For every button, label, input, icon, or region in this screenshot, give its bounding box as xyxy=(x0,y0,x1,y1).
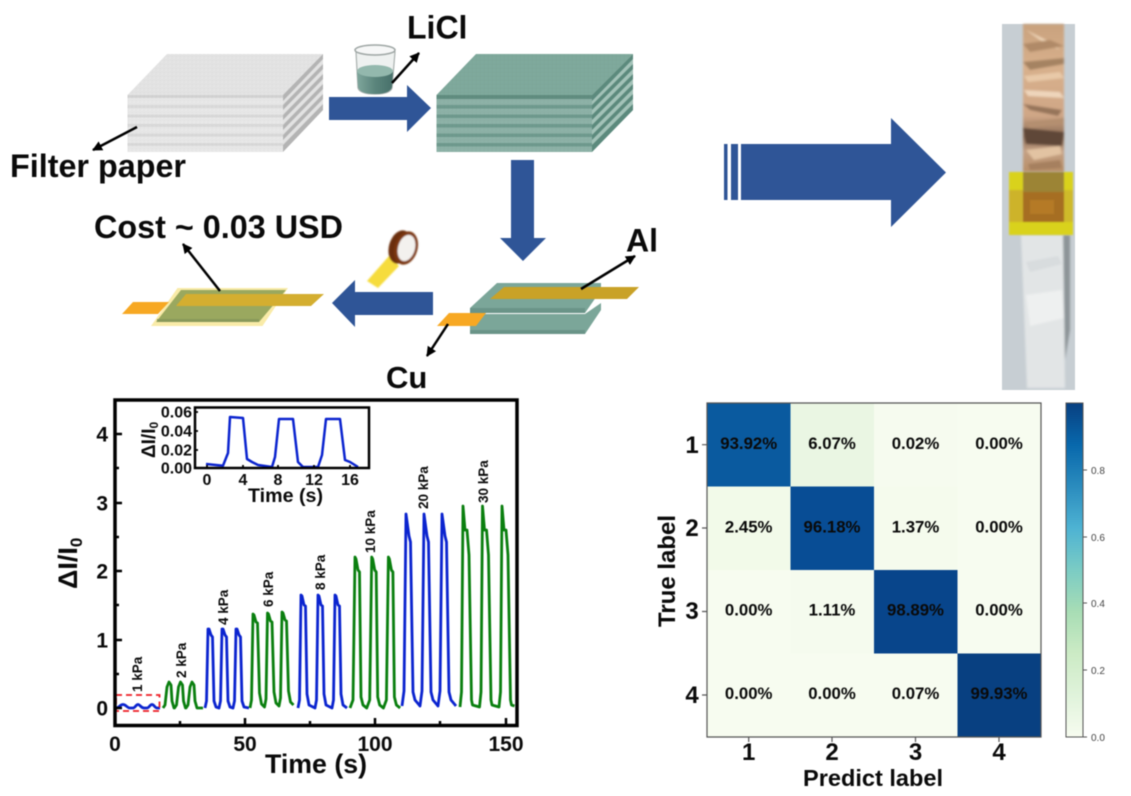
label: Cu: Cu xyxy=(386,360,427,395)
pressure labels: 2 kPa xyxy=(174,642,189,678)
chart curve: 30 kPa xyxy=(460,506,514,707)
line chart: current response vs time xyxy=(53,400,524,779)
inset chart: 1 kPa response: 0 xyxy=(203,472,212,489)
matrix values: 0.00% xyxy=(725,684,773,703)
inset chart: 1 kPa response: ΔI/I xyxy=(139,428,160,458)
matrix row labels xyxy=(685,432,699,709)
matrix values: 96.18% xyxy=(804,518,861,536)
pressure labels: 30 kPa xyxy=(476,460,491,503)
colorbar: 0.4 xyxy=(1091,599,1105,610)
inset chart: 1 kPa response: 0.00 xyxy=(161,460,192,478)
chart curve: 20 kPa xyxy=(402,514,456,706)
callout: dashed red box xyxy=(116,695,160,711)
polyimide tape xyxy=(1009,172,1073,235)
x axis tick labels: 150 xyxy=(488,733,524,756)
pressure labels: 10 kPa xyxy=(363,510,378,553)
y axis title: 0 xyxy=(67,538,86,547)
confusion matrix heatmap xyxy=(655,403,1105,791)
pressure labels: 1 kPa xyxy=(130,656,145,692)
x axis tick labels: 50 xyxy=(233,733,257,756)
chart curve: 1 kPa xyxy=(116,704,160,708)
inset chart: 1 kPa response: 8 xyxy=(274,472,283,489)
device: paper with Al and Cu electrodes xyxy=(437,283,639,334)
inset chart: 1 kPa response: 4 xyxy=(239,472,248,489)
matrix values: 6.07% xyxy=(808,434,856,453)
colorbar xyxy=(1066,403,1105,744)
pressure labels: 8 kPa xyxy=(313,554,328,590)
matrix column labels xyxy=(742,739,1006,766)
arrow: cost callout xyxy=(183,244,220,291)
matrix row labels: 4 xyxy=(685,682,699,709)
chart curve: 6 kPa xyxy=(250,612,294,708)
x axis title: Time (s) xyxy=(265,749,367,779)
matrix values xyxy=(720,434,1028,703)
matrix row labels: 1 xyxy=(685,432,699,459)
matrix values: 0.00% xyxy=(975,600,1023,620)
x axis tick labels: 100 xyxy=(357,733,393,756)
matrix column labels: 4 xyxy=(992,739,1006,766)
icon: polyimide tape roll xyxy=(367,228,422,288)
icon: beaker of LiCl solution xyxy=(355,45,395,94)
pressure labels: 4 kPa xyxy=(216,589,231,625)
stack: filter paper xyxy=(128,54,323,152)
matrix values: 1.11% xyxy=(809,600,855,620)
arrow: beaker to LiCl label xyxy=(392,53,419,83)
matrix row labels: 3 xyxy=(685,598,699,625)
chart curve: 10 kPa xyxy=(350,557,400,708)
arrow: filter paper callout xyxy=(93,127,137,150)
colorbar: 0.6 xyxy=(1091,533,1105,544)
inset chart: 1 kPa response xyxy=(139,404,369,507)
y axis tick labels: 0 xyxy=(96,698,108,720)
photo: fabricated sensor xyxy=(1002,24,1075,390)
chart curve: 4 kPa xyxy=(205,629,249,708)
label: Al: Al xyxy=(626,222,658,258)
axis ticks xyxy=(115,434,506,725)
inset chart: 1 kPa response: 0.02 xyxy=(161,442,192,460)
inset chart: 1 kPa response: 0 xyxy=(147,422,161,428)
inset chart: 1 kPa response: 12 xyxy=(305,472,323,489)
pressure labels: 20 kPa xyxy=(416,466,431,509)
pressure labels xyxy=(130,460,491,692)
arrow: stack down to electrode assembly xyxy=(500,160,546,261)
chart frame xyxy=(115,400,517,726)
y axis tick labels: 3 xyxy=(96,492,108,516)
x axis tick labels xyxy=(109,733,524,756)
arrow: filter paper to LiCl soaked stack xyxy=(329,85,431,132)
arrow: Al callout xyxy=(581,256,635,289)
matrix cells xyxy=(707,403,1041,737)
process schematic xyxy=(10,10,658,395)
x axis title: Predict label xyxy=(803,765,943,791)
matrix values: 0.02% xyxy=(892,434,939,453)
matrix values: 0.00% xyxy=(808,684,856,703)
x axis tick labels: 0 xyxy=(109,733,121,756)
matrix values: 0.00% xyxy=(975,518,1023,536)
chart curve: 2 kPa xyxy=(163,682,203,708)
aluminum electrode xyxy=(1021,235,1070,388)
y axis tick labels: 1 xyxy=(96,630,108,652)
chart curve: 8 kPa xyxy=(298,595,347,708)
colorbar: 0.0 xyxy=(1091,733,1105,744)
y axis tick labels: 2 xyxy=(96,560,108,584)
matrix values: 93.92% xyxy=(720,434,777,453)
inset chart: 1 kPa response: Time (s) xyxy=(248,485,323,507)
matrix frame and ticks xyxy=(702,403,1041,742)
y axis tick labels xyxy=(96,424,108,720)
inset chart: 1 kPa response: 0.06 xyxy=(161,404,192,422)
inset chart: 1 kPa response: 16 xyxy=(341,472,359,489)
pressure labels: 6 kPa xyxy=(261,571,276,607)
copper electrode xyxy=(1023,24,1064,172)
matrix column labels: 3 xyxy=(909,739,922,766)
y axis tick labels: 4 xyxy=(96,424,108,446)
arrow: big striped arrow to device photo xyxy=(724,118,946,227)
matrix column labels: 2 xyxy=(825,739,839,766)
colorbar: 0.8 xyxy=(1091,466,1105,477)
matrix values: 0.00% xyxy=(725,600,773,620)
matrix values: 0.00% xyxy=(975,434,1023,453)
device: encapsulated sensor xyxy=(122,288,324,326)
label: cost: Cost ~ 0.03 USD xyxy=(94,209,343,245)
matrix values: 0.07% xyxy=(892,684,939,703)
matrix values: 1.37% xyxy=(892,518,939,536)
y axis title: True label xyxy=(655,515,681,627)
matrix row labels: 2 xyxy=(685,515,699,542)
colorbar: 0.2 xyxy=(1091,666,1105,677)
y axis title: ΔI/I xyxy=(53,547,83,589)
label: LiCl: LiCl xyxy=(407,10,467,46)
matrix values: 98.89% xyxy=(887,600,944,620)
inset chart: 1 kPa response: 0.04 xyxy=(161,424,192,440)
arrow: Cu callout xyxy=(427,324,448,356)
arrow: assembly to encapsulation xyxy=(332,280,433,327)
matrix values: 2.45% xyxy=(725,518,773,536)
stack: LiCl soaked paper xyxy=(436,54,633,152)
matrix column labels: 1 xyxy=(742,739,755,766)
label: Filter paper: Filter paper xyxy=(10,148,186,184)
matrix values: 99.93% xyxy=(971,684,1028,703)
